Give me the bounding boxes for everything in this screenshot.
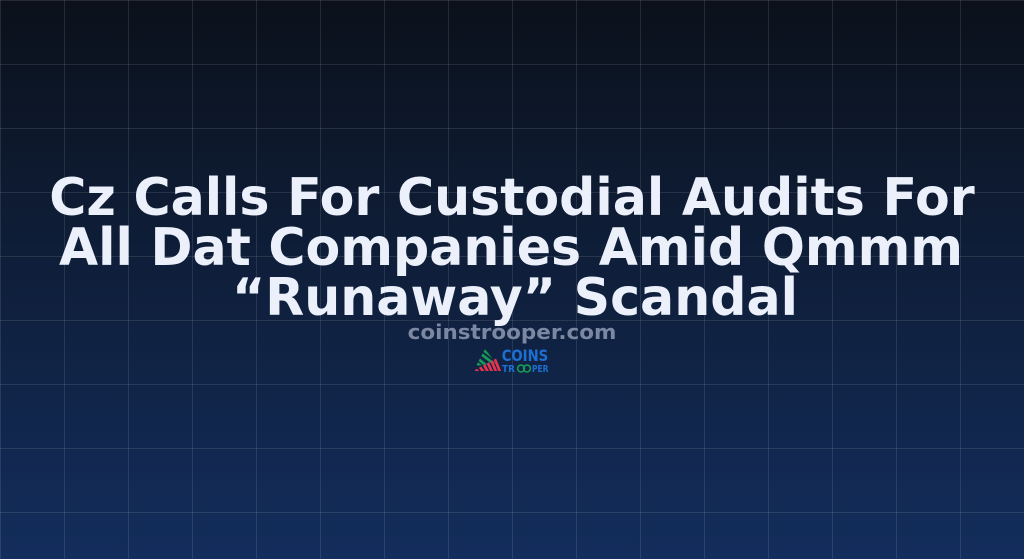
title [49, 168, 975, 328]
website address: coinstrooper.com [408, 320, 616, 344]
logo: Coins Trooper [474, 347, 549, 375]
title: “Runaway” Scandal [232, 268, 798, 328]
title: Cz Calls For Custodial Audits For [49, 168, 975, 228]
title: All Dat Companies Amid Qmmm [59, 218, 963, 278]
logo: Coins Trooper: TR [502, 364, 515, 375]
